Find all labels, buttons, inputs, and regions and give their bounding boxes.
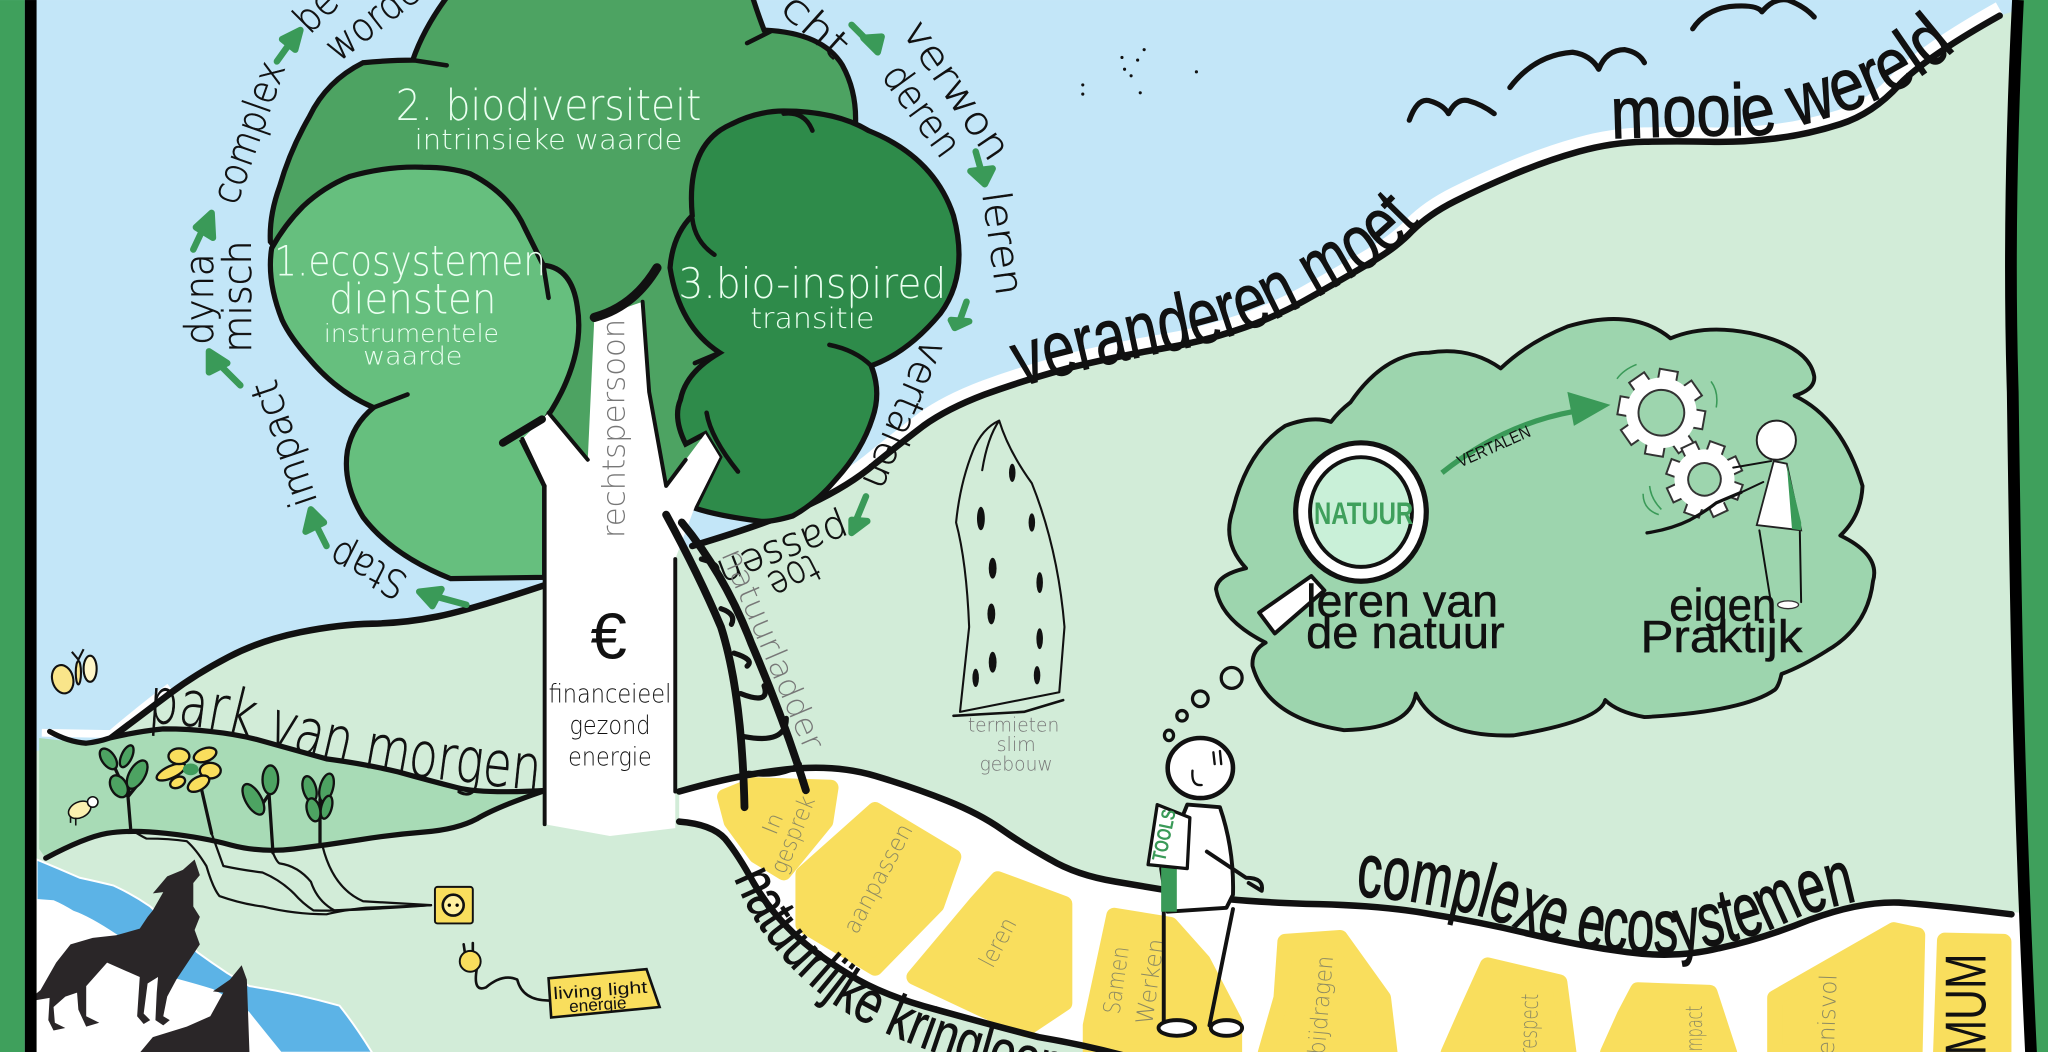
trunk lines [503, 268, 686, 824]
circular text around tree: toe [760, 544, 827, 607]
heading: complexe ecosystemen: complexe ecosystemen [1358, 856, 1855, 967]
legs [1164, 909, 1233, 1025]
label: living light energie: living light [553, 978, 648, 1003]
label: termieten slim gebouw: termieten [968, 713, 1059, 736]
tree [270, 0, 959, 836]
heading: veranderen moet: veranderen moet [1009, 192, 1419, 384]
wolf 1 [26, 859, 200, 1031]
gear motion marks [1617, 364, 1717, 515]
flower bed [39, 729, 549, 858]
icon: butterfly [49, 649, 97, 696]
ladder [666, 515, 806, 807]
plants and flower [96, 743, 337, 853]
backpack: TOOLS [1148, 807, 1181, 863]
right border [2011, 0, 2048, 1052]
person with tools backpack [1148, 738, 1262, 1036]
label: financieel gezond energie: financeieel [549, 680, 671, 710]
magnifying glass: NATUUR [1314, 496, 1413, 531]
distant dots [1081, 48, 1198, 96]
flower bed lines [46, 729, 549, 858]
label: bio-inspired: transitie [750, 301, 874, 335]
label: bio-inspired [679, 259, 946, 335]
circular text around tree: deren [872, 55, 970, 166]
label: living light energie: energie [568, 993, 627, 1016]
left border [0, 0, 37, 1052]
white hill edge [42, 9, 2000, 734]
crown notches [374, 31, 871, 472]
label: financieel gezond energie: gezond [569, 711, 650, 741]
trunk [522, 302, 720, 836]
label: ecosystemen diensten: 1.ecosystemen [274, 237, 546, 286]
thought circles [1164, 667, 1242, 741]
icon: gear large [1611, 363, 1711, 463]
circular text around tree: dyna [178, 253, 223, 345]
stone labels: Werken [1130, 937, 1170, 1026]
path outline [679, 768, 2011, 1052]
label: biodiversiteit: intrinsieke waarde [415, 125, 682, 156]
magnifying glass [1259, 443, 1426, 633]
stone labels: In [757, 809, 789, 838]
label: termieten slim gebouw [968, 713, 1059, 776]
circular text around tree: misch [216, 240, 261, 353]
stone labels: aanpassen [837, 819, 919, 938]
circular text around tree: impact [242, 375, 327, 513]
heading: park van morgen: park van morgen [152, 686, 537, 796]
leaf arrows [193, 25, 993, 606]
icon: euro: € [590, 599, 627, 672]
label: ecosystemen diensten: instrumentele [324, 319, 499, 348]
label: financieel gezond energie [549, 680, 671, 772]
socket [435, 887, 473, 923]
crown: bio-inspired [670, 111, 959, 521]
label: termieten slim gebouw: gebouw [980, 753, 1053, 776]
label: eigen praktijk [1640, 579, 1803, 662]
label: living light energie [549, 969, 660, 1017]
circular text around tree: Stap [322, 530, 415, 607]
label: rechtspersoon: rechtspersoon [596, 319, 632, 538]
icon: gear small [1656, 431, 1753, 528]
stone labels: Samen [1098, 945, 1135, 1016]
label: ecosystemen diensten: diensten [329, 274, 496, 323]
river bank [37, 895, 281, 1052]
backpack [1148, 805, 1190, 869]
green stripe [1161, 867, 1177, 912]
circular text around tree: complex [203, 56, 295, 210]
torso [1161, 805, 1233, 912]
stone labels: gesprek [765, 792, 821, 877]
plug and cable [460, 943, 549, 1001]
stone labels [757, 792, 1843, 1052]
arrow: vertalen: VERTALEN [1454, 422, 1533, 471]
feet [1159, 1020, 1242, 1036]
label: bio-inspired: 3.bio-inspired [679, 259, 946, 308]
stepping stones [725, 785, 2004, 1052]
white path band [679, 768, 2038, 1052]
birds [1409, 0, 1814, 120]
hill line [111, 16, 2000, 738]
circular text around tree: vertalen [852, 333, 956, 496]
label: MUM: MUM [1934, 953, 1998, 1052]
cloud [1216, 319, 1874, 736]
label: leren van de natuur: leren van [1306, 576, 1498, 627]
circular text around tree: verwon [893, 12, 1019, 169]
label: leren van de natuur [1306, 576, 1505, 658]
label: leren van de natuur: de natuur [1306, 607, 1505, 658]
label: financieel gezond energie: energie [568, 742, 652, 772]
label: ecosystemen diensten: waarde [363, 341, 462, 370]
label: ecosystemen diensten [274, 237, 546, 370]
circular text around tree: passen [711, 504, 855, 596]
label: biodiversiteit [396, 81, 701, 156]
crown: ecosystemen diensten [270, 167, 579, 579]
termite building [953, 421, 1064, 716]
wolf 2 [140, 965, 249, 1052]
head [1168, 738, 1233, 798]
crown: biodiversiteit [270, 0, 856, 496]
label: biodiversiteit: 2. biodiversiteit [396, 81, 701, 131]
circular text around tree [178, 0, 1031, 607]
label: natuurladder: natuurladder [714, 543, 831, 755]
roots to socket [131, 829, 431, 914]
small person [1647, 421, 1801, 609]
river [37, 859, 372, 1052]
icon: bee [66, 797, 98, 825]
label: termieten slim gebouw: slim [997, 733, 1036, 756]
label: eigen praktijk: Praktijk [1640, 611, 1803, 662]
label: eigen praktijk: eigen [1669, 579, 1776, 630]
arrow: vertalen [1442, 392, 1610, 473]
arm [1207, 852, 1262, 891]
thought bubble [1216, 319, 1874, 736]
circular text around tree: leren [972, 188, 1031, 298]
stone labels: leren [973, 913, 1022, 972]
